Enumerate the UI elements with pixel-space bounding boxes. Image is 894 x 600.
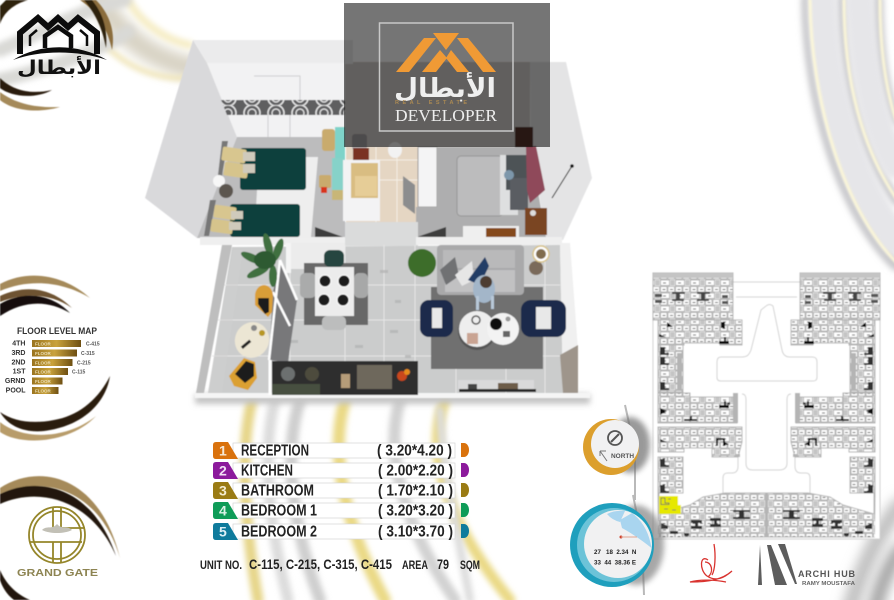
row: bedroom 1: ( 3.20*3.20 )	[378, 502, 453, 520]
row: bedroom 2	[213, 523, 469, 540]
icon: orange roof	[396, 33, 496, 72]
unit info line	[200, 556, 480, 572]
row: reception: 1	[219, 442, 227, 458]
location pin	[620, 536, 637, 538]
door: bedroom 2	[417, 227, 446, 237]
highlighted unit	[659, 496, 681, 514]
icon: north arrow	[600, 451, 607, 461]
brush swirl: top-left	[0, 0, 113, 111]
walls: living room left and right	[195, 243, 590, 398]
floor rows: GRND	[5, 378, 26, 385]
floor level map	[0, 276, 110, 440]
bench: bedroom 2 foot	[463, 226, 519, 237]
brush swirl: floor map	[0, 276, 110, 440]
unit info line: UNIT NO.	[200, 558, 242, 572]
location badge: 33 44 38.36 E	[594, 560, 636, 566]
coffee tables	[458, 311, 519, 350]
unit info line: C-115, C-215, C-315, C-415	[249, 556, 392, 572]
floor rows: C-315	[81, 351, 95, 357]
floor rows: 2ND	[11, 360, 26, 366]
floor rows: FLOOR	[35, 360, 51, 366]
floor: bedroom 2	[416, 147, 546, 237]
location badge	[570, 495, 664, 595]
floor rows: C-415	[86, 342, 100, 348]
logo: Al Abtal houses: الأبطال	[17, 56, 101, 79]
text: north: NORTH	[611, 453, 634, 460]
bathroom	[343, 134, 418, 223]
door: bedroom 1	[315, 227, 343, 237]
balcony glass doors	[269, 260, 297, 395]
compass badge	[583, 405, 650, 500]
floor rows: C-115	[72, 370, 86, 376]
logo: Archi Hub: RAMY MOUSTAFA	[802, 581, 855, 587]
nightstand: lamp	[213, 175, 233, 198]
text: grand gate: GRAND GATE	[17, 567, 98, 579]
bench: teal vanity	[319, 127, 346, 200]
seated figure	[473, 275, 495, 310]
closet wall: bedroom 1	[193, 40, 345, 137]
row: bedroom 1: BEDROOM 1	[241, 502, 317, 520]
logo panel: developer	[344, 3, 550, 147]
logo: Al Abtal houses	[13, 18, 107, 79]
text: coordinates: 27 18 2.34 N	[594, 549, 637, 556]
row: bathroom: 3	[219, 482, 227, 498]
icon: GG emblem	[29, 507, 85, 563]
console	[458, 380, 536, 392]
row: bedroom 2: ( 3.10*3.70 )	[378, 524, 453, 540]
floor rows: FLOOR	[35, 351, 51, 356]
row: reception: RECEPTION	[241, 442, 309, 460]
floor rows: FLOOR	[35, 388, 51, 394]
floor rows: 3RD	[11, 350, 26, 357]
floor rows: 1ST	[13, 368, 26, 376]
brush swirl: grand gate	[0, 476, 120, 600]
plant: living room	[408, 249, 436, 277]
row: kitchen: 2	[219, 462, 227, 478]
bed: bedroom 1 upper	[218, 141, 306, 190]
row: kitchen	[213, 462, 469, 480]
floor rows	[5, 340, 100, 394]
floor plan: 3D apartment render	[145, 40, 592, 404]
logo: Archi Hub	[758, 544, 856, 587]
floor rows: FLOOR	[35, 342, 51, 346]
row: bathroom: ( 1.70*2.10 )	[378, 482, 453, 500]
row: bathroom	[213, 482, 469, 500]
building key plan	[653, 273, 880, 539]
rug: bedroom 1	[256, 157, 318, 237]
floor lamp	[529, 246, 549, 275]
brand: Grand Gate	[0, 476, 120, 600]
row: bathroom: BATHROOM	[241, 482, 314, 500]
map water	[607, 511, 652, 548]
floor rows: FLOOR	[35, 370, 51, 374]
unit info line: AREA	[402, 560, 428, 572]
row: bedroom 2: 5	[219, 524, 227, 540]
floor rows: POOL	[6, 388, 26, 394]
floor: bedroom 1	[197, 137, 345, 238]
row: reception	[213, 442, 469, 460]
bed: bedroom 2	[457, 127, 547, 235]
floor: living room	[208, 245, 563, 393]
plant: balcony	[239, 232, 286, 287]
plan shadow	[195, 394, 590, 404]
dining set	[300, 250, 368, 330]
kitchen counter	[272, 361, 418, 395]
balcony chairs and table	[229, 285, 275, 390]
room schedule	[213, 442, 469, 540]
heading: floor level map: FLOOR LEVEL MAP	[17, 326, 98, 337]
sofa	[437, 245, 524, 295]
row: bedroom 1	[213, 502, 469, 520]
wall: bedroom 2 right marble	[530, 62, 592, 240]
text: arabic name: الأبطال	[394, 72, 496, 104]
wall: bedroom 1 outer left	[145, 40, 237, 238]
unit info line: SQM	[460, 560, 480, 572]
wardrobe: bedroom 2	[418, 147, 437, 207]
floor rows: C-215	[77, 360, 91, 366]
row: bedroom 2: BEDROOM 2	[241, 524, 317, 540]
icon: compass	[608, 431, 622, 445]
living room rug	[431, 287, 543, 369]
row: reception: ( 3.20*4.20 )	[377, 442, 452, 460]
text: developer: DEVELOPER	[395, 106, 498, 125]
logo: Archi Hub: ARCHI HUB	[798, 569, 856, 579]
floor rows: 4TH	[12, 340, 26, 348]
signature	[690, 544, 732, 582]
armchairs	[420, 300, 566, 337]
bed: bedroom 1 lower	[204, 200, 300, 237]
unit info line: 79	[437, 556, 449, 572]
floor: corridor tiles	[345, 222, 418, 246]
row: kitchen: ( 2.00*2.20 )	[378, 462, 453, 480]
floor rows: FLOOR	[35, 379, 51, 384]
back rooms wall	[345, 62, 530, 147]
row: bedroom 1: 4	[219, 502, 227, 518]
text: real estate: REAL ESTATE	[395, 100, 467, 106]
row: kitchen: KITCHEN	[241, 462, 293, 480]
wall: middle divider	[200, 237, 562, 245]
road lines	[717, 282, 817, 493]
